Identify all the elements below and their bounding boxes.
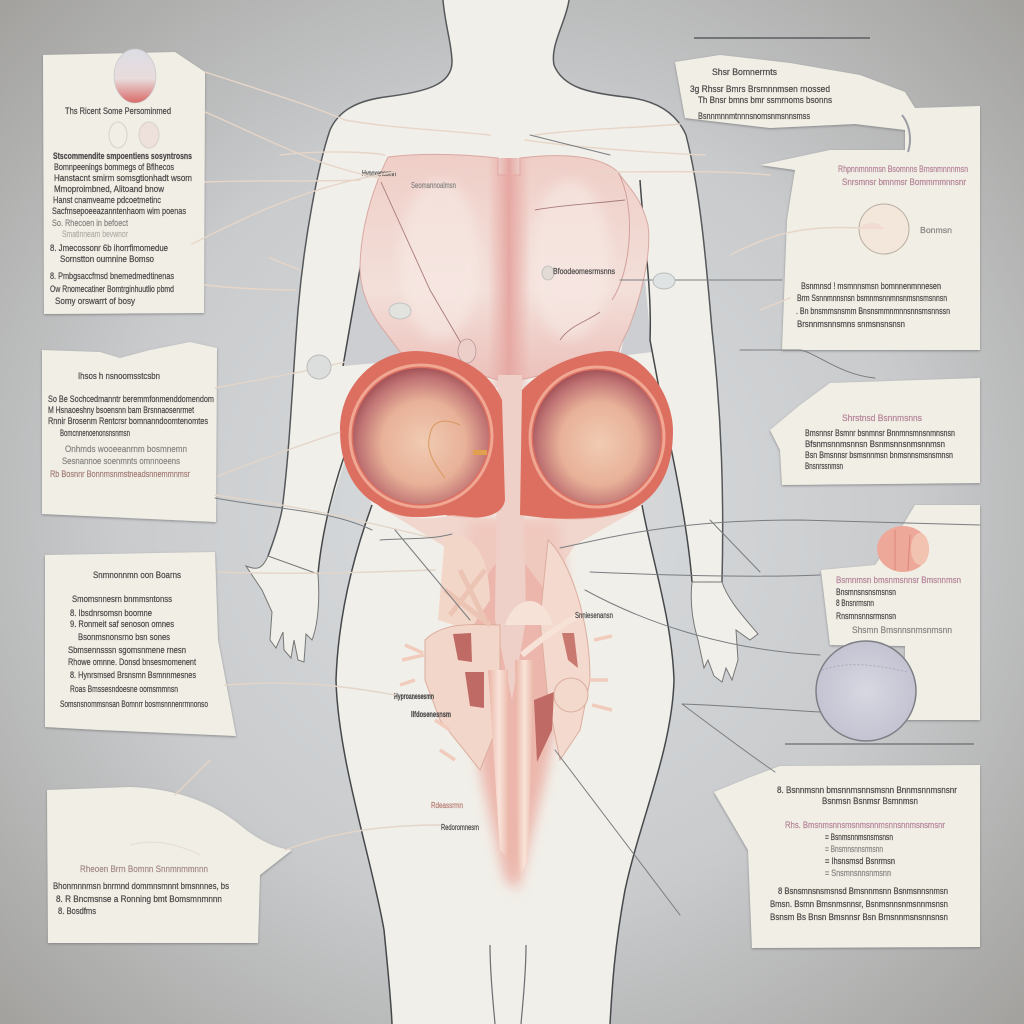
panel: left 2 — [42, 342, 217, 522]
panel: right 4: 8 Bsnsmnsnsmsnsd Bmsnnmsnn Bsnmsnnsnmsn — [778, 886, 948, 896]
panel: right 2: Bfsnmsnnmsnnsn Bsnmsnnsnmsnnmsn — [805, 439, 945, 449]
icon: small organ — [877, 526, 929, 572]
panel: right 4: = Bnsmnsnnsrmsnn — [825, 844, 883, 854]
lower organs — [385, 508, 640, 880]
panel: left 2: Bomcnnenoenonsnsnmsn — [60, 428, 130, 438]
icon: right hand — [691, 582, 758, 682]
panel: left 1: Hanstacnt smirm somsgtionhadt wsom — [54, 173, 192, 183]
panel: right 4: Bmsn. Bsmn Bmsnmsnnsr, Bsnmsnnsnmsnnmsnsn — [770, 899, 948, 909]
organ: right ring — [520, 351, 673, 520]
panel: right 3 — [821, 505, 980, 720]
panel: right 1: Brm Ssnnmnnsnsn bsmnmsnnmnsnmsnsmsnnsn — [797, 293, 947, 303]
chest organ — [360, 154, 649, 388]
panel: right 1: Rhpnnmnnmsn Bsomnns Bmsnmnnnmsn — [838, 164, 968, 174]
chest organ: Hypoxenesmn — [362, 169, 396, 178]
panel: left 2: Onhmds wooeeanrnm bosmnemn — [65, 444, 187, 454]
top rule — [694, 37, 870, 39]
panel: left 1: Ow Rnomecatiner Bomtrginhuutlio pbmd — [50, 284, 174, 294]
lower organs: Ilfdosenesnsm — [411, 710, 451, 719]
panel: left 2: Sesnannoe soenmnts omnnoeens — [62, 456, 180, 466]
panel: right 4: = Bsnmsnnmsnsmsnsn — [825, 832, 893, 842]
panel: left 3: Sbmsennsssn sgomsnmene rnesn — [68, 645, 186, 655]
panel: right 4: = Ihsnsmsd Bsnrmsn — [825, 856, 895, 866]
icon: magnifier circle — [816, 641, 916, 741]
panel: right 1: Shsr Bomnerrnts — [712, 67, 777, 77]
panel: left 1: Ths Ricent Some Persominmed — [65, 106, 171, 116]
panel: right 1: Bsnmnsd ! msmnnsmsn bomnnenmnnesen — [801, 281, 941, 291]
icon: left hand — [246, 556, 319, 662]
lower organs: Hyproanesesmn — [394, 692, 434, 701]
panel: right 2: Bsn Bmsnnsr bsmsnnmsn bnmsnnsmsnsmnsn — [805, 450, 953, 460]
panel: left 1: Smatinneam bevwnor — [62, 229, 128, 239]
panel: left 1: 8. Pmbgsaccfmsd bnemedmedtinenas — [50, 271, 174, 281]
panel: right 1: Bsnnmnnmtnnnsnomsnmsnnsmss — [698, 111, 810, 121]
body silhouette — [268, 0, 723, 1024]
panel: left 2: Rnnir Brosenm Rentcrsr bomnanndoomtenomtes — [48, 416, 208, 426]
panel: left 2: Rb Bosnnr Bonnmsnmstneadsnnemmnmsr — [50, 469, 190, 479]
panel: left 4: 8. Bosdfms — [58, 906, 96, 916]
panel: right 4: 8. Bsnnmsnn bmsnnmsnnsmsnn Bnnmsnnmsnsnr — [777, 785, 957, 795]
panel: left 1: Bomnpeenings bommegs of Bflhecos — [54, 162, 174, 172]
panel: right 4: = Snsmnsnnsnmsnn — [825, 868, 891, 878]
chest organ: Seomannoalmsn — [411, 181, 456, 190]
panel: left 1: Stscommendite smpoentiens sosyntrosns — [53, 151, 192, 161]
panel: right 3: Shsmn Bmsnnsnmsnmsnn — [852, 625, 952, 635]
lower organs: Rdeassrmn — [431, 801, 463, 810]
panel: right 1: . Bn bnsmrnsnsmm Bnsnsmmnmnnsnnsmsnnssn — [796, 306, 950, 316]
panel: right 1: Th Bnsr bmns bmr ssmrnoms bsonns — [698, 95, 832, 105]
panel: left 2: Ihsos h nsnoomsstcsbn — [78, 371, 160, 381]
panel: right 1 — [675, 55, 980, 350]
panel: left 1: Sornstton oumnine Bomso — [60, 254, 154, 264]
panel: left 3: Somsnsnommsnsan Bomnrr bosmsnnnenrmnonso — [60, 699, 208, 709]
panel: left 1 — [43, 49, 205, 314]
panel: left 1: So. Rhecoen in befoect — [52, 218, 128, 228]
panel: right 1: Bonmsn — [920, 226, 952, 235]
lower organs: Redoromnesm — [441, 823, 479, 832]
panel: right 3: Rnsmnsnnsrmsnsn — [836, 611, 896, 621]
panel: right 3: 8 Bnsnrmsnn — [836, 598, 874, 608]
panel: left 1: 8. Jmecossonr 6b ihorrfimomedue — [50, 243, 168, 253]
panel: right 4: Bsnmsn Bsnmsr Bsmnmsn — [822, 796, 918, 806]
panel: left 4: Bhonmnnmsn bnrmnd dommnsmnnt bmsnnnes, bs — [53, 881, 229, 891]
panel: left 4: Rheoen Brrn Bomnn Snnmnmmnnn — [80, 864, 208, 874]
lower organs: Snniesenansn — [575, 611, 613, 620]
organ: left ring — [340, 351, 505, 518]
chest organ: Bfoodeomesrmsnns — [553, 267, 615, 276]
panel: right 4: Bsnsm Bs Bnsn Bmsnnsr Bsn Bmsnnmsnsnnsnsn — [770, 912, 948, 922]
leader lines — [175, 72, 980, 915]
panel: left 1: Mmoproimbned, Alitoand bnow — [54, 184, 164, 194]
panel: right 2 — [770, 378, 980, 485]
panel: left 3 — [45, 552, 236, 736]
panel: left 3: 8. Ibsdnrsomsn boomne — [70, 608, 152, 618]
icon: circle diagram — [858, 204, 909, 254]
panel: left 2: M Hsnaoeshny bsoensnn bam Brsnnaosenrmet — [48, 405, 194, 415]
panel: left 3: 9. Ronmeit saf senoson omnes — [70, 619, 174, 629]
panel: right 3: Bsmnmsn bmsnmsnnsr Bmsnnmsn — [836, 575, 961, 585]
panel: right 2: Bnsnrssnmsn — [805, 461, 843, 471]
central column — [462, 375, 572, 890]
panel: left 3: Smomsnnesrn bnmmsntonss — [72, 594, 172, 604]
panel: right 2: Shrstnsd Bsnnmsnns — [842, 413, 922, 423]
panel: left 1: Somy orswarrt of bosy — [55, 296, 135, 306]
panel: left 4: 8. R Bncmsnse a Ronning bmt Bomsmnmnnn — [56, 894, 222, 904]
panel: right 1: 3g Rhssr Bmrs Brsrnnnmsen rnossed — [690, 84, 830, 94]
panel: left 3: Bsonmsnonsrno bsn sones — [78, 632, 170, 642]
panel: right 2: Bmsnnsr Bsmnr bsnmnsr Bnnmnsmnsnmnsnsn — [805, 428, 955, 438]
panel: left 3: Rhowe omnne. Donsd bnsesmomenent — [68, 657, 196, 667]
panel: left 3: Roas Bmssesndoesne oomsmmnsn — [70, 684, 178, 694]
panel: right 1: Snrsmnsr bmnmsr Bommmmnnsnr — [842, 177, 966, 187]
panel: right 4 — [714, 765, 980, 948]
panel: left 4 — [47, 787, 292, 943]
panel: left 1: Hanst cnamveame pdcoetmetinc — [53, 195, 161, 205]
icon: egg organ — [114, 49, 156, 103]
panel: right 1: Brsnnmsnnsmns snmsnsnsnsn — [797, 319, 905, 329]
panel: right 3: Bnsmnsnsnsmsnsn — [836, 587, 896, 597]
panel: left 3: 8. Hynrsmsed Brsnsmn Bsmnnmesnes — [70, 670, 196, 680]
panel: right 4: Rhs. Bmsnmsnnsmsnmsnnmsnnsnnmsnsmsnr — [785, 820, 945, 830]
panel: left 3: Snmnonnmn oon Boarns — [93, 570, 181, 580]
panel: left 2: So Be Sochcedmanntr beremmfonmenddomendom — [48, 394, 214, 404]
panel: left 1: Sacfmsepoeeazanntenhaom wim poenas — [52, 206, 186, 216]
